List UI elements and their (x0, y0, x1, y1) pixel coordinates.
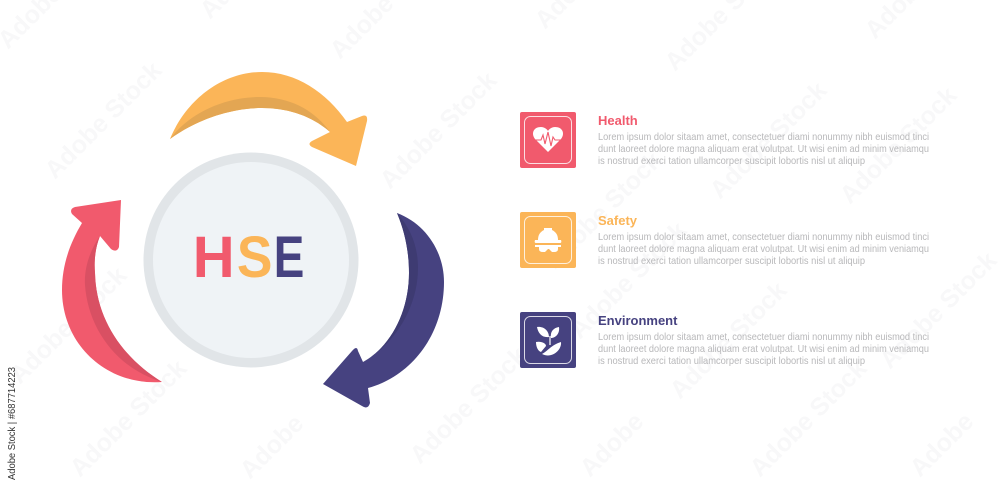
text: Adobe (574, 407, 649, 480)
text block: Safety: Lorem ipsum dolor sitaam amet, consectetuer diami nonummy nibh euismod tinci (598, 232, 929, 243)
text block: Health (598, 132, 929, 167)
HSE heading: S (237, 225, 272, 289)
text block: Health: Lorem ipsum dolor sitaam amet, consectetuer diami nonummy nibh euismod tinci (598, 132, 929, 143)
icon: helmet and goggles (520, 212, 576, 268)
text block: Environment: is nostrud exerci tation ullamcorper suscipit lobortis nisl ut aliquip (598, 356, 865, 367)
text block: Safety: dunt laoreet dolore magna aliquam erat volutpat. Ut wisi enim ad minim veniamqu (598, 244, 929, 255)
text block: Environment: dunt laoreet dolore magna aliquam erat volutpat. Ut wisi enim ad minim veniamqu (598, 344, 929, 355)
text: Adobe Stock (704, 76, 832, 204)
text: Adobe Stock (834, 81, 962, 209)
stock credit: Adobe Stock | #687714223 (6, 367, 18, 480)
text block: Health: is nostrud exerci tation ullamcorper suscipit lobortis nisl ut aliquip (598, 156, 865, 167)
icon: plant in hand (520, 312, 576, 368)
text block: Safety (598, 232, 929, 267)
HSE heading: E (274, 226, 304, 290)
text: Adobe Stock (874, 246, 1000, 374)
text block: Environment: Lorem ipsum dolor sitaam amet, consectetuer diami nonummy nibh euismod tinci (598, 332, 929, 343)
center circle (144, 152, 358, 368)
HSE heading: H (193, 225, 235, 290)
text: Adobe (904, 407, 979, 480)
text: Adobe Stock (539, 146, 667, 274)
text: Adobe Stock (374, 66, 502, 194)
HSE heading (193, 225, 304, 290)
text: Adobe Stock (664, 276, 792, 404)
arrow: navy right arrow (323, 213, 444, 407)
text: Adobe Stock (744, 354, 872, 480)
text: Adobe Stock (404, 341, 532, 469)
icon: heart with pulse (520, 112, 576, 168)
heading: Health: Health (598, 113, 638, 128)
text block: Safety: is nostrud exerci tation ullamcorper suscipit lobortis nisl ut aliquip (598, 256, 865, 267)
text block: Health: dunt laoreet dolore magna aliquam erat volutpat. Ut wisi enim ad minim veniamqu (598, 144, 929, 155)
text: Adobe Stock (39, 56, 167, 184)
arrow: yellow top arrow (170, 72, 367, 166)
text: Adobe Stock (564, 216, 692, 344)
text block: Environment (598, 332, 929, 367)
row: Health (520, 112, 929, 168)
text: Adobe Stock (64, 354, 192, 480)
heading: Safety: Safety (598, 213, 638, 228)
heading: Environment: Environment (598, 313, 678, 328)
row: Environment (520, 312, 929, 368)
row: Safety (520, 212, 929, 268)
text: Adobe Stock (4, 261, 132, 389)
arrow: red left arrow (62, 200, 162, 382)
